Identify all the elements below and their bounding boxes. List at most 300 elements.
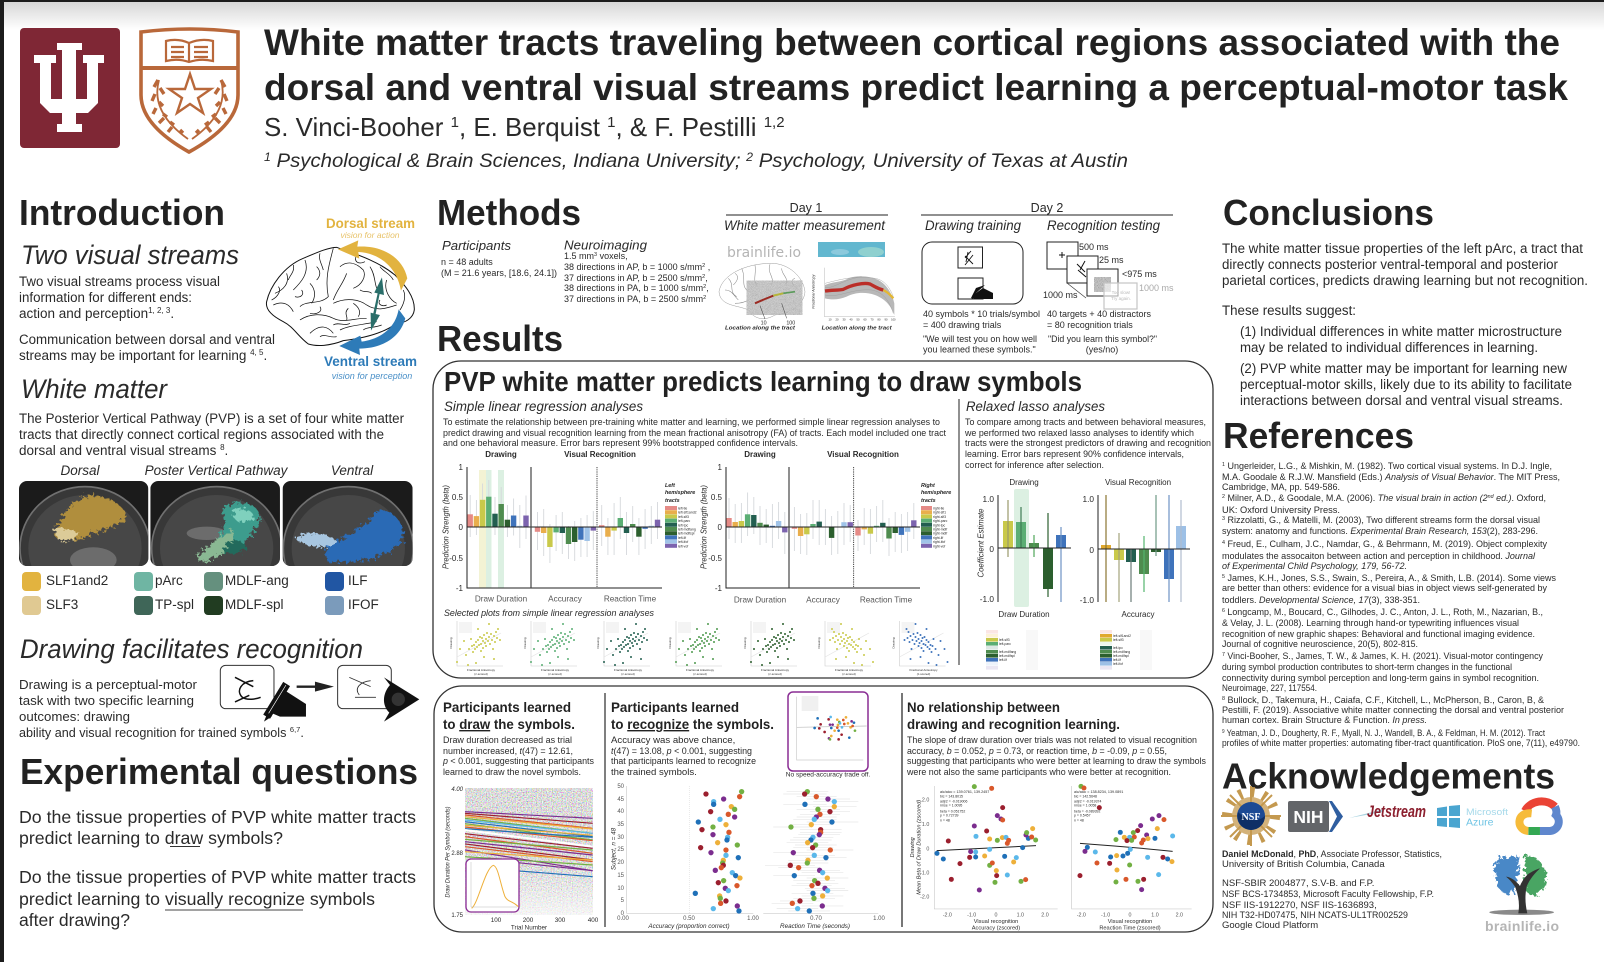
chart: draw duration over trials: 200	[523, 917, 534, 924]
methods: recognition testing: Try again.	[1111, 296, 1131, 301]
text: references: 3	[1222, 516, 1225, 522]
text: acknowledgement names: NSF IIS-1912270, NSF IIS-1636893,	[1222, 900, 1377, 911]
text: references: Vinci-Booher, S., James, T. W., & James, K. H. (2021). Visual-motor contingency	[1225, 651, 1543, 661]
arrow: drawing to seeing	[297, 682, 334, 692]
text: references: The visual brain in action (2	[1378, 493, 1488, 503]
chart: drawing vs recognition accuracy: 2.0	[1041, 912, 1049, 918]
chart: tract profile: 30	[843, 317, 846, 321]
title: White matter tracts traveling between cortical regions associated with the	[264, 21, 1560, 63]
logo: University of Texas shield	[141, 29, 238, 152]
logo: brainlife tree	[1485, 855, 1559, 934]
chart: drawing vs recognition accuracy: Accuracy (zscored)	[972, 926, 1020, 932]
logo: NIH	[1288, 801, 1343, 832]
heading: learned to recognize: to recognize the symbols.	[611, 716, 774, 732]
text: references: 2	[1222, 494, 1225, 500]
chart: right hemisphere regression bars: Drawing	[744, 450, 776, 459]
text: references: 5	[1222, 574, 1225, 580]
legend: right hemisphere tracts: right-ifof	[933, 540, 945, 544]
heading: Experimental questions: Experimental questions	[20, 751, 418, 792]
text: references: Ungerleider, L.G., & Mishkin, M. (1982). Two cortical visual systems. In D.J. Ingle,	[1225, 461, 1552, 471]
heading: Methods: Methods	[437, 192, 581, 233]
image: ventral tracts	[282, 481, 413, 566]
methods: neuroimaging	[564, 238, 710, 304]
chart: drawing vs recognition reaction time: rmse = 1.0058	[1074, 804, 1096, 808]
methods: recognition testing: 40 targets + 40 distractors	[1047, 309, 1151, 319]
logo: Google Cloud	[1519, 801, 1559, 831]
methods: neuroimaging: voxels,	[597, 251, 628, 261]
text: learned to recognize: the trained symbols.	[611, 767, 697, 778]
legend: left hemisphere tracts	[665, 483, 697, 548]
text: conclusions: directly connects posterior ventral-temporal and posterior	[1222, 257, 1558, 272]
methods: neuroimaging: ,	[705, 262, 710, 272]
inset: distribution curve	[466, 859, 519, 912]
chart: drawing vs recognition accuracy: bic = 143.8015	[940, 794, 963, 798]
chart: draw duration over trials: 300	[555, 917, 566, 924]
legend: left hemisphere tracts: left-mdlfspl	[678, 532, 695, 536]
text: references: 4	[1222, 540, 1225, 546]
text: references: Journal of cognitive neuroscience, 20(5), 802-815.	[1222, 639, 1418, 649]
methods: participants: n = 48 adults	[441, 257, 493, 267]
text: references: & Velay, J. L. (2008). Learning through hand-or typewriting influences visual	[1222, 618, 1519, 628]
chart: drawing vs recognition accuracy: Drawing	[910, 837, 916, 857]
text: relaxed lasso: tracts were the strongest predictors of drawing and recognition	[965, 438, 1211, 449]
legend: left hemisphere tracts: left-parc	[678, 519, 691, 523]
methods: neuroimaging: 2	[702, 274, 705, 280]
methods: day 1 white matter measurement: Day 1	[790, 201, 822, 215]
chart: lasso visual recognition: -1.0	[1080, 595, 1094, 605]
text: learned to draw: p < 0.001, suggesting that participants	[442, 756, 594, 767]
subheading: White matter: White matter	[21, 374, 168, 404]
chart: drawing vs recognition accuracy: -2.0	[920, 895, 929, 901]
chart: lasso drawing: 1.0	[982, 494, 994, 504]
text: references: Freud, E., Culham, J.C., Namdar, G., & Behrmann, M. (2019). Object complexity	[1225, 539, 1547, 549]
banner image	[818, 242, 885, 257]
text: references: . Oxford,	[1512, 493, 1547, 503]
text: white matter: dorsal and ventral visual streams	[19, 443, 216, 458]
text: references: 7	[1222, 652, 1225, 658]
text: learned to draw: learned to draw the novel symbols.	[443, 767, 581, 778]
heading: learned to draw	[443, 699, 575, 732]
heading: learned to recognize: Participants learned	[611, 699, 739, 715]
chart: draw duration over trials: 400	[588, 917, 599, 924]
legend: lasso recognition tracts: left-tpc	[1113, 646, 1123, 650]
chart: draw duration over trials: Trial Number	[511, 924, 547, 932]
icon: draw then see symbol	[220, 665, 419, 722]
heading: no relationship	[907, 699, 1120, 732]
text: conclusions: perceptual-motor skills, likely due to its ability to facilitate	[1240, 377, 1572, 392]
methods: recognition testing: (yes/no)	[1086, 344, 1118, 354]
text: no relationship: accuracy, b = 0.052, p = 0.73, or reaction time, b = -0.09, p = 0.55,	[907, 746, 1167, 757]
legend: right hemisphere tracts: hemisphere	[921, 490, 951, 496]
chart: tract profile	[811, 268, 896, 331]
text: references: Pestilli, F. (2019). Associative white matter connecting the dorsal and ventral posterior	[1222, 705, 1564, 715]
diagram: brain with dorsal and ventral streams: vision for action	[340, 230, 400, 240]
chart: right hemisphere regression bars: 1	[718, 463, 723, 472]
methods: neuroimaging: 38 directions in AP, b = 1000 s/mm	[564, 262, 702, 272]
text: references: recognition of new graphic shapes: Behavioral and functional imaging evidence.	[1222, 629, 1535, 639]
text: relaxed lasso: learning. Error bars represent 90% confidence intervals,	[965, 449, 1184, 460]
images: brain tracts	[19, 481, 413, 566]
methods: neuroimaging: 1.5 mm	[564, 251, 594, 261]
chart: left hemisphere regression bars: Drawing	[485, 450, 517, 459]
chart: drawing vs recognition accuracy: 0	[926, 846, 929, 852]
chart: drawing vs recognition reaction time: beta = -0.089392	[1074, 809, 1100, 813]
text: acknowledgement names: Daniel McDonald, PhD, Associate Professor, Statistics,	[1222, 849, 1442, 860]
legend: right hemisphere tracts	[921, 483, 951, 548]
chart: draw duration over trials: Draw Duration Per Symbol (seconds)	[444, 806, 452, 898]
text: references: Neuroimage, 227, 117554.	[1222, 683, 1317, 693]
legend: tract colours	[22, 572, 379, 615]
chart: tract profile: 100	[891, 317, 896, 321]
text: relaxed lasso: correct for inference after selection.	[965, 460, 1104, 471]
chart: accuracy by subject: 10	[617, 886, 625, 892]
text: relaxed lasso	[964, 417, 1211, 471]
legend: lasso recognition tracts: left-mdlfspl	[1113, 654, 1129, 658]
panel heading: PVP white matter predicts learning to draw symbols	[444, 366, 1082, 397]
methods: neuroimaging: Neuroimaging	[564, 238, 648, 252]
text: experimental questions: predict learning to draw symbols?	[19, 828, 283, 848]
legend: right hemisphere tracts: right-mdlf	[933, 532, 947, 536]
methods: drawing training	[922, 218, 1040, 354]
tract image labels: Dorsal	[60, 463, 101, 478]
text: experimental questions	[19, 807, 416, 930]
chart: accuracy by subject: 0	[621, 911, 625, 917]
chart: lasso visual recognition	[1080, 478, 1190, 619]
chart: reaction time by subject: Reaction Time (seconds)	[780, 923, 850, 930]
legend: lasso drawing tracts: left-mdlfang	[999, 650, 1016, 654]
text: no relationship: suggesting that participants who were better at learning to draw the symbols	[907, 756, 1206, 767]
logo: Indiana University	[20, 28, 120, 148]
legend: tract colours: TP-spl	[155, 597, 194, 612]
chart: drawing vs recognition reaction time: 2.0	[1176, 912, 1183, 918]
chart: tract profile: Fractional Anisotropy	[811, 273, 815, 309]
heading: Introduction: Introduction	[19, 192, 225, 233]
affiliations: 2	[745, 150, 753, 164]
text: drawing facilitates recognition: task with two specific learning	[19, 694, 194, 708]
brain with tract profile: 100	[786, 320, 795, 326]
text: simple linear regression: To estimate the relationship between pre-training white matter and learning, we performed simple linear regression analyses to	[443, 417, 940, 428]
chart: tract profile: 10	[829, 317, 832, 321]
subheading: selected plots: Selected plots from simple linear regression analyses	[444, 608, 654, 619]
chart: drawing vs recognition accuracy: 1.0	[922, 822, 929, 828]
chart: lasso drawing: Drawing	[1009, 478, 1039, 487]
legend: lasso recognition tracts: left-slf1and2	[1113, 634, 1131, 638]
icon: drawing box with hand	[220, 665, 306, 722]
text: white matter: tracts that directly connect cortical regions associated with the	[19, 427, 384, 442]
methods: participants: (M = 21.6 years, [18.6, 24.1])	[441, 268, 557, 278]
text: white matter	[19, 411, 404, 458]
chart: accuracy by subject: 45	[617, 797, 625, 803]
chart: lasso drawing: Draw Duration	[998, 610, 1050, 619]
brain with tract profile: 10	[761, 320, 767, 326]
chart: right hemisphere regression bars	[700, 450, 951, 604]
text: conclusions: (2) PVP white matter may be important for learning new	[1240, 361, 1567, 376]
chart: right hemisphere regression bars: Draw Duration	[734, 596, 787, 604]
text: two visual streams: streams may be important for learning	[19, 348, 246, 363]
text: acknowledgement names: NSF-SBIR 2004877, S.V-B. and F.P.	[1222, 878, 1374, 889]
chart: accuracy by subject: 40	[617, 809, 625, 815]
text: references: are better than others: evidence for a visual bias in object views self-generated by	[1222, 583, 1547, 593]
text: drawing facilitates recognition: 6,7	[290, 725, 300, 734]
legend: lasso drawing tracts: left-ilf	[999, 658, 1007, 662]
chart: accuracy by subject: 1.00	[747, 916, 759, 922]
logo: Microsoft Azure: Azure	[1466, 816, 1494, 828]
heading: no relationship: drawing and recognition learning.	[907, 716, 1120, 732]
chart: drawing vs recognition accuracy	[910, 784, 1058, 932]
legend: right hemisphere tracts: Right	[921, 483, 935, 489]
text: simple linear regression	[443, 417, 946, 449]
legend: left hemisphere tracts: left-slf3	[678, 515, 689, 519]
chart: tract profile: 40	[850, 317, 853, 321]
chart: reaction time by subject	[763, 789, 885, 930]
text: two visual streams: action and perception	[19, 306, 148, 321]
chart: right hemisphere regression bars: Reaction Time	[860, 596, 913, 604]
legend: left hemisphere tracts: tracts	[665, 498, 680, 504]
legend: left hemisphere tracts: hemisphere	[665, 490, 695, 496]
text: drawing facilitates recognition: ability and visual recognition for trained symbols	[19, 726, 286, 740]
legend: lasso recognition tracts: left-ifof	[1113, 662, 1123, 666]
text: references: connectivity during symbol perception and long-term gains in symbol recognition.	[1222, 673, 1539, 683]
text: white matter: .	[225, 443, 228, 458]
chart: left hemisphere regression bars: Accuracy	[548, 594, 583, 604]
legend: right hemisphere tracts: right-mdlf	[933, 528, 947, 532]
text: simple linear regression: predict drawing and visual recognition learning from the mean fractional anisotropy (FA) of tracts. Each model included one tract	[443, 428, 946, 439]
diagram: brain with dorsal and ventral streams: vision for perception	[332, 371, 412, 381]
chart: lasso visual recognition: 1.0	[1082, 494, 1094, 504]
chart: accuracy by subject: 5	[621, 898, 625, 904]
chart: drawing vs recognition accuracy: 1.0	[1017, 912, 1024, 918]
legend: left hemisphere tracts: left-mdlfang	[678, 528, 696, 532]
chart: accuracy by subject: 15	[617, 873, 625, 879]
text: learned to draw: number increased, t(47) = 12.61,	[443, 746, 573, 757]
chart: lasso visual recognition: Visual Recognition	[1105, 478, 1171, 487]
legend: tract colours: SLF1and2	[46, 573, 108, 588]
chart: accuracy by subject: 0.00	[617, 916, 629, 922]
text: relaxed lasso: To compare among tracts and between behavioral measures,	[965, 417, 1206, 428]
subheading: Drawing facilitates recognition: Drawing facilitates recognition	[20, 634, 363, 664]
text: acknowledgement names: Google Cloud Platform	[1222, 920, 1318, 931]
chart: drawing vs recognition accuracy: -2.0	[943, 912, 952, 918]
legend: lasso drawing tracts	[986, 630, 1038, 670]
chart: left hemisphere regression bars: Prediction Strength (beta)	[442, 485, 450, 569]
authors: 1	[607, 114, 616, 131]
text: simple linear regression: and one behavioral measure. Error bars represent 99% bootstrapped confidence intervals.	[443, 438, 798, 449]
text: no relationship: The slope of draw duration over trials was not related to visual recognition	[907, 735, 1197, 746]
text: conclusions	[1222, 241, 1588, 408]
logo: brainlife tree: brainlife.io	[1485, 918, 1559, 934]
text: conclusions: (1) Individual differences in white matter microstructure	[1240, 324, 1562, 339]
chart: lasso drawing: Coefficient Estimate	[976, 508, 986, 578]
methods: neuroimaging: 2	[702, 263, 705, 269]
heading: learned to draw: to draw the symbols.	[443, 716, 575, 732]
methods: day 1 white matter measurement: brainlife.io	[727, 245, 801, 261]
text: experimental questions: Do the tissue properties of PVP white matter tracts	[19, 867, 416, 887]
text: two visual streams: Communication between dorsal and ventral	[19, 332, 275, 347]
text: white matter: The Posterior Vertical Pathway (PVP) is a set of four white matter	[19, 411, 404, 426]
methods: recognition testing: Recognition testing	[1047, 218, 1160, 233]
subheading: Two visual streams: Two visual streams	[21, 240, 239, 270]
chart: left hemisphere regression bars	[442, 450, 697, 604]
text: references: human cortex. Brain Structure & Function. In press.	[1222, 715, 1427, 725]
methods: neuroimaging: 3	[594, 252, 597, 258]
authors: 1	[451, 114, 459, 131]
chart: lasso drawing	[976, 478, 1071, 619]
text: references: nd	[1488, 494, 1494, 500]
chart: accuracy by subject: 20	[617, 860, 625, 866]
legend: left hemisphere tracts: left-ilf	[678, 536, 686, 540]
chart: drawing vs recognition reaction time: 1.0	[1151, 912, 1159, 918]
text: conclusions: interactions between dorsal and ventral visual streams.	[1240, 393, 1563, 408]
diagram: brain with dorsal and ventral streams: Dorsal stream	[326, 216, 415, 231]
heading: Acknowledgements: Acknowledgements	[1222, 756, 1555, 796]
text: drawing facilitates recognition: outcomes: drawing	[19, 710, 130, 724]
methods: neuroimaging: 37 directions in PA, b = 2500 s/mm	[564, 294, 703, 304]
logo: Jetstream	[1349, 802, 1426, 821]
text: two visual streams: information for different ends:	[19, 290, 192, 305]
chart: drawing vs recognition accuracy: 0	[995, 912, 998, 918]
methods: neuroimaging: 37 directions in AP, b = 2500 s/mm	[564, 273, 702, 283]
chart: drawing vs recognition accuracy: Visual recognition	[974, 919, 1018, 925]
text: references: profiles of white matter properties: automating fiber-tract quantification. PloS one, 7(11), e49790.	[1222, 738, 1580, 748]
chart: left hemisphere regression bars: -0.5	[449, 554, 464, 563]
text: references: Milner, A.D., & Goodale, M.A. (2006).	[1225, 493, 1378, 503]
legend: right hemisphere tracts: right-tie	[933, 506, 944, 510]
chart: draw duration over trials: 2.88	[451, 851, 464, 857]
methods: recognition testing: = 80 recognition trials	[1047, 320, 1133, 330]
text: drawing facilitates recognition	[19, 678, 304, 740]
arrow: ventral stream	[339, 309, 405, 355]
methods: participants	[441, 238, 557, 278]
arrow: connection between streams	[371, 277, 384, 331]
brain with tract profile: Location along the tract	[725, 325, 796, 331]
subheading: simple linear regression: Simple linear regression analyses	[444, 399, 643, 414]
legend: tract colours: SLF3	[46, 597, 78, 612]
text: references: M.A. Goodale & R.J.W. Mansfield (Eds.) Analysis of Visual Behavior. The MIT Press,	[1222, 472, 1560, 482]
chart: drawing vs recognition reaction time	[1072, 784, 1192, 932]
methods: neuroimaging: ,	[706, 283, 709, 293]
text: no relationship: were not also the same participants who were better at recognition.	[906, 767, 1171, 778]
chart: right hemisphere regression bars: Accuracy	[806, 596, 841, 604]
text: learned to recognize	[611, 735, 756, 778]
chart: left hemisphere regression bars: Visual Recognition	[564, 450, 636, 459]
text: references: 6	[1222, 608, 1225, 614]
text: white matter: 8	[220, 443, 225, 452]
chart: tract profile: 20	[836, 317, 839, 321]
text: learned to draw: Draw duration decreased as trial	[443, 735, 572, 746]
legend: left hemisphere tracts: left-vof	[678, 544, 688, 548]
chart: drawing vs recognition reaction time: 0	[1128, 912, 1131, 918]
panel: behavioural results	[434, 686, 1213, 932]
inset: speed accuracy scatter	[786, 692, 870, 778]
subheading: relaxed lasso: Relaxed lasso analyses	[966, 399, 1105, 414]
text: learned to draw	[442, 735, 594, 778]
text: relaxed lasso: we performed two relaxed lasso analyses to identify which	[964, 428, 1194, 439]
title	[264, 21, 1568, 108]
methods: drawing training: 40 symbols * 10 trials/symbol	[923, 309, 1040, 319]
affiliations: 1	[264, 150, 271, 164]
chart: drawing vs recognition accuracy: aic/aicc = 139.0761, 139.2457	[940, 790, 989, 794]
methods: neuroimaging: 2	[703, 284, 706, 290]
legend: right hemisphere tracts: right-ilf	[933, 536, 943, 540]
logo: NSF: NSF	[1242, 812, 1260, 823]
chart: left hemisphere regression bars: Draw Duration	[475, 594, 528, 604]
chart: accuracy by subject: 25	[617, 847, 625, 853]
heading: References: References	[1223, 415, 1414, 456]
methods: recognition testing: 1000 ms	[1043, 290, 1078, 300]
legend: lasso drawing tracts: left-mdlfspl	[999, 654, 1015, 658]
chart: draw duration over trials: 100	[491, 917, 502, 924]
text: acknowledgement names: NSF BCS-1734853, Microsoft Faculty Fellowship, F.P.	[1222, 889, 1434, 900]
heading: no relationship: No relationship between	[907, 699, 1060, 715]
methods: neuroimaging: 38 directions in PA, b = 1000 s/mm	[564, 283, 703, 293]
text: two visual streams: .	[170, 306, 174, 321]
legend: left hemisphere tracts: left-slf1and2	[678, 511, 697, 515]
text: drawing facilitates recognition: .	[300, 726, 304, 740]
text: references: 9	[1222, 729, 1225, 735]
chart: lasso drawing: 0	[989, 544, 994, 554]
charts: selected regression scatter plots	[449, 621, 948, 676]
logo: Jetstream: Jetstream	[1367, 802, 1426, 821]
chart: accuracy by subject: 50	[617, 784, 625, 790]
chart: accuracy by subject: Subject, n = 48	[610, 827, 618, 870]
chart: drawing vs recognition accuracy: Mean Beta of Draw Duration (zscored)	[917, 800, 923, 895]
text: references: Cambridge, MA, pp. 549-586.	[1222, 482, 1340, 492]
chart: reaction time by subject: 1.00	[873, 916, 885, 922]
legend: left hemisphere tracts: left-tie	[678, 506, 687, 510]
methods: recognition testing: "Did you learn this symbol?"	[1048, 334, 1157, 344]
legend: lasso recognition tracts: left-slf3	[1113, 638, 1124, 642]
text: learned to recognize: that participants learned to recognize	[611, 756, 756, 767]
chart: tract profile: 80	[877, 317, 881, 321]
heading: learned to draw: Participants learned	[443, 699, 571, 715]
legend: tract colours: MDLF-spl	[225, 597, 284, 612]
chart: drawing vs recognition accuracy: -1.0	[967, 912, 976, 918]
methods: recognition testing: 1000 ms	[1139, 283, 1174, 293]
legend: tract colours: MDLF-ang	[225, 573, 289, 588]
legend: right hemisphere tracts: right-vof	[933, 544, 945, 548]
text: references: ed.)	[1494, 493, 1512, 503]
legend: left hemisphere tracts: left-ifof	[678, 540, 688, 544]
logo: NSF	[1221, 786, 1281, 846]
text: references	[1222, 461, 1580, 748]
chart: drawing vs recognition reaction time: p = 0.5457	[1074, 814, 1091, 818]
chart: drawing vs recognition accuracy: rmse = 1.0095	[940, 804, 962, 808]
text: references: toddlers. Developmental Science, 17(3), 338-351.	[1222, 595, 1420, 605]
text: learned to recognize: t(47) = 13.08, p < 0.001, suggesting	[611, 746, 752, 757]
chart: right hemisphere regression bars: -1	[715, 584, 723, 593]
chart: left hemisphere regression bars: 0.5	[452, 493, 464, 502]
chart: left hemisphere regression bars: 1	[459, 463, 464, 472]
chart: drawing vs recognition accuracy: adjr2 = -0.019006	[940, 799, 967, 803]
methods: neuroimaging: ,	[705, 273, 708, 283]
chart: drawing vs recognition reaction time: adjr2 = -0.019374	[1074, 799, 1101, 803]
chart: tract profile: 90	[884, 317, 888, 321]
logo: NIH: NIH	[1293, 807, 1324, 827]
text: two visual streams	[19, 274, 275, 363]
chart: drawing vs recognition accuracy: 2.0	[922, 797, 929, 803]
chart: right hemisphere regression bars: -0.5	[708, 554, 723, 563]
text: references: of Experimental Child Psychology, 179, 56-72.	[1222, 561, 1407, 571]
chart: drawing vs recognition reaction time: bic = 142.5648	[1074, 794, 1097, 798]
chart: drawing vs recognition reaction time: n = 48	[1074, 818, 1084, 822]
chart: reaction time by subject: 0.70	[810, 916, 822, 922]
chart: accuracy by subject: 35	[617, 822, 625, 828]
methods: recognition testing	[1043, 218, 1174, 354]
affiliations: Psychology, University of Texas at Austin	[753, 150, 1128, 172]
text: two visual streams: 4, 5	[250, 348, 264, 357]
text: acknowledgement names: NIH T32-HD07475, NIH NCATS-UL1TR002529	[1222, 910, 1408, 921]
chart: left hemisphere regression bars: 0	[459, 523, 464, 532]
